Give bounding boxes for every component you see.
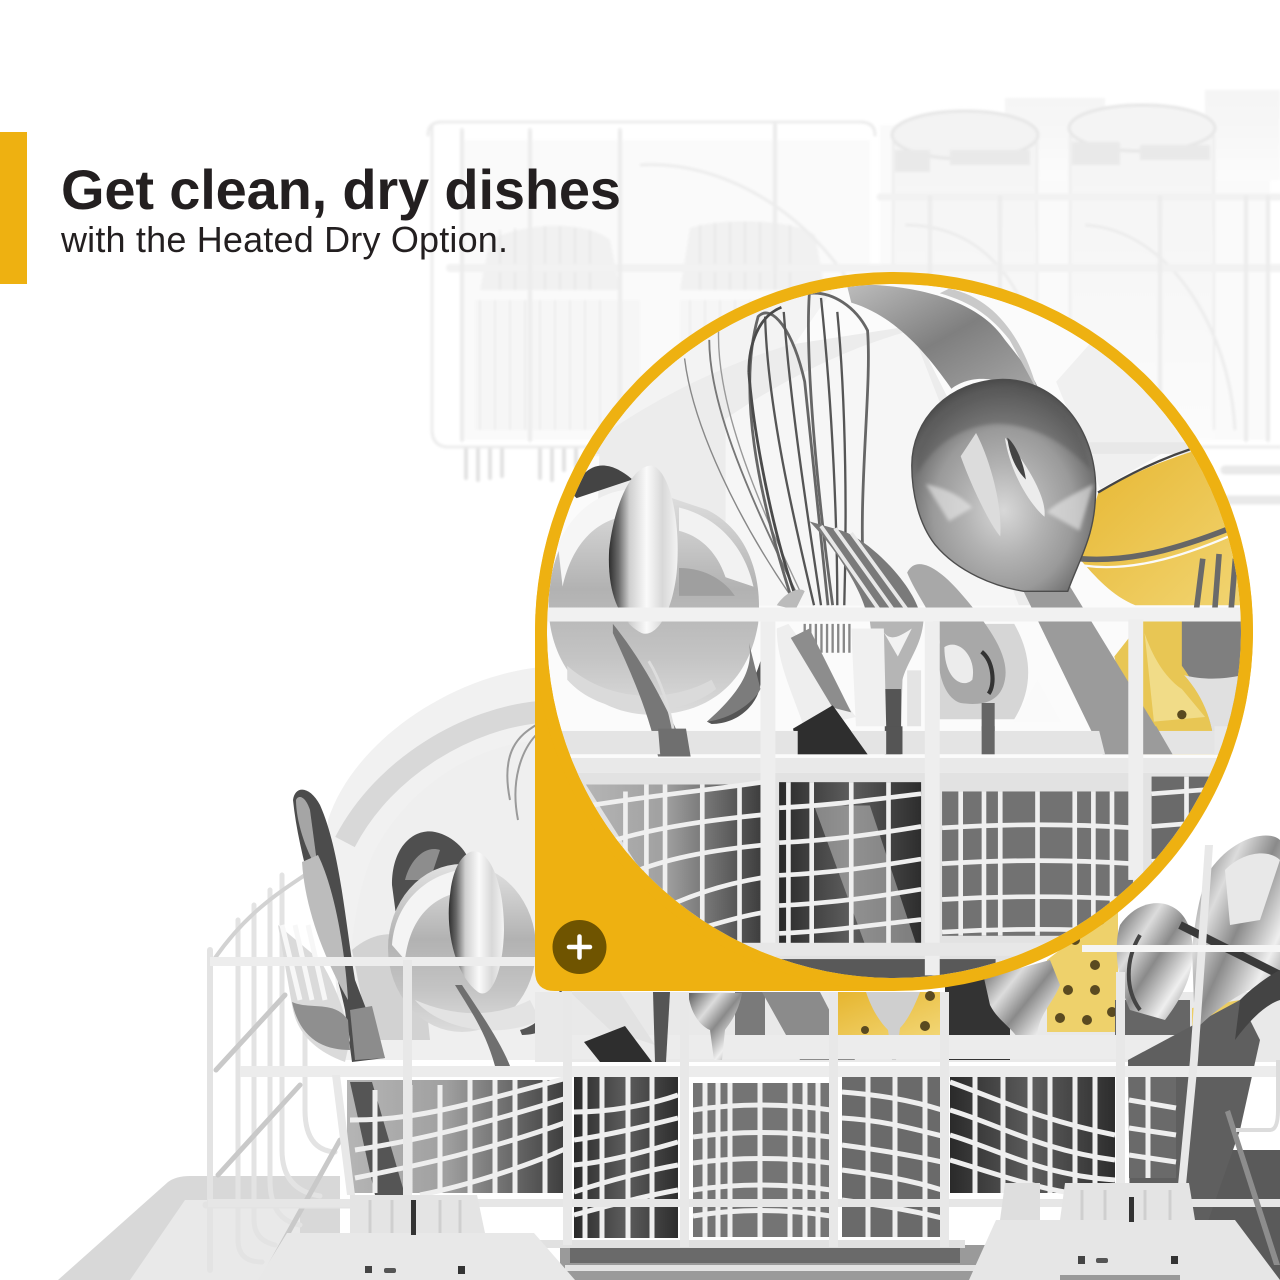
faded upper dish rack (428, 90, 1280, 500)
title: Get clean, dry dishes (61, 158, 621, 221)
magnified compartment ledge (558, 705, 1238, 757)
yellow magnifier lens frame (535, 273, 1253, 991)
magnified fork in the middle (809, 521, 923, 754)
magnified basket (578, 773, 1210, 978)
magnified basket panel right (1152, 776, 1209, 864)
utensils between the yellow lens and the lower basket (535, 905, 1280, 1062)
magnified photo inside lens (547, 284, 1241, 978)
magnified spatula and handle (940, 587, 1173, 754)
rack wires (428, 122, 1280, 500)
magnified plate (595, 284, 1051, 605)
fork lower left (278, 925, 350, 1062)
magnified lower dark stripe (782, 959, 996, 978)
magnified bowl (549, 465, 760, 724)
magnified black handled tool (707, 590, 868, 754)
basket panel 6 (1129, 1072, 1176, 1178)
lower plate behind cutlery (327, 667, 620, 1060)
basket panel 5 (950, 1073, 1115, 1195)
right side serving spoons (1117, 835, 1280, 1230)
magnified basket panel left (586, 782, 763, 945)
mixing bowl lower (388, 864, 572, 1035)
magnified basket panel center-right (942, 791, 1133, 936)
magnified basket panel middle (779, 782, 921, 950)
subtitle: with the Heated Dry Option. (60, 219, 508, 260)
lower tray base (58, 1060, 1280, 1280)
magnified slotted spoon (912, 379, 1096, 591)
basket panel 2 (574, 1076, 678, 1238)
back spoon (392, 831, 470, 915)
magnified yellow bowl (1080, 448, 1241, 754)
magnified front spoon (608, 466, 678, 756)
plus button (552, 920, 606, 974)
right basket clip tab (969, 1183, 1280, 1280)
magnified serving spoon small (907, 564, 1006, 754)
cutlery: dark spoon and knife (293, 790, 385, 1062)
left wire side of lower rack (206, 875, 350, 1280)
basket panel 1 (347, 1078, 567, 1195)
left basket clip tab (258, 1195, 575, 1280)
yellow lens ring overlay (541, 278, 1247, 984)
magnified whisk (685, 293, 868, 653)
accent bar (0, 132, 27, 284)
basket panel 4 (842, 1074, 942, 1237)
basket rim bars (208, 845, 1280, 1271)
lower basket grids (208, 845, 1280, 1271)
magnified background (530, 270, 1260, 1000)
basket panel 3 (693, 1083, 831, 1237)
front spoon lower (449, 851, 510, 1066)
magnified fork right (1182, 554, 1242, 754)
magnified rack wires (544, 608, 1247, 975)
faded plates and glasses (460, 90, 1280, 440)
